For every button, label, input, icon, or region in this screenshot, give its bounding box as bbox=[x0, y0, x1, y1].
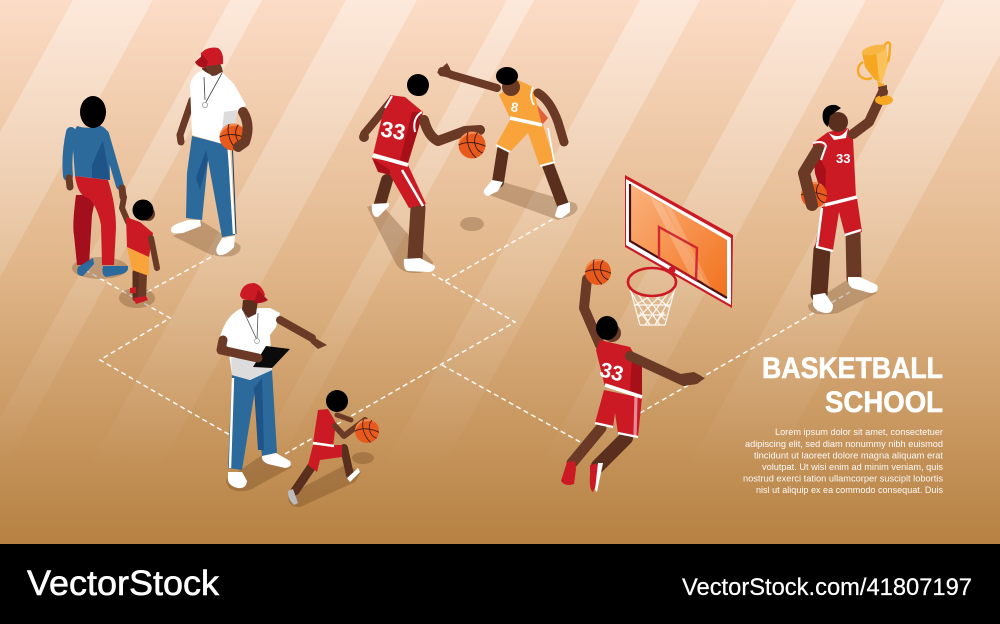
body text bbox=[743, 427, 943, 495]
footer bar bbox=[0, 544, 1000, 624]
shadows on floor bbox=[72, 182, 877, 507]
net bbox=[630, 288, 675, 325]
body text: nisl ut aliquip ex ea commodo consequat. Duis bbox=[756, 485, 943, 495]
body text: Lorem ipsum dolor sit amet, consectetuer bbox=[775, 427, 943, 437]
cap bbox=[201, 48, 223, 66]
child dribbling bbox=[288, 390, 379, 505]
woman parent bbox=[67, 96, 128, 277]
cap bbox=[240, 283, 265, 300]
child holding hand bbox=[122, 197, 157, 304]
title: BASKETBALL bbox=[762, 352, 943, 385]
jersey number: 33 bbox=[836, 151, 850, 166]
basketball hoop bbox=[625, 175, 733, 325]
title: SCHOOL bbox=[825, 386, 943, 419]
footer url: VectorStock.com/41807197 bbox=[682, 574, 972, 601]
body text: nostrud exerci tation ullamcorper suscipit lobortis bbox=[743, 474, 943, 484]
title bbox=[762, 352, 943, 419]
rim bbox=[628, 268, 676, 296]
footer logo: VectorStock bbox=[27, 564, 220, 603]
clipboard bbox=[253, 346, 290, 368]
hair bbox=[80, 96, 106, 128]
body text: volutpat. Ut wisi enim ad minim veniam, quis bbox=[762, 462, 943, 472]
trophy bbox=[858, 42, 893, 105]
court lines bbox=[85, 218, 850, 454]
coach with ball bbox=[171, 48, 248, 255]
body text: adipiscing elit, sed diam nonummy nibh euismod bbox=[745, 439, 943, 449]
body text: tincidunt ut laoreet dolore magna aliquam erat bbox=[754, 450, 943, 460]
legs bbox=[73, 195, 96, 265]
player 8 defender bbox=[437, 63, 570, 218]
backboard bbox=[625, 175, 733, 308]
jersey number: 33 bbox=[379, 116, 407, 145]
ball dribbled bbox=[458, 132, 486, 158]
jersey number: 33 bbox=[597, 358, 626, 386]
player dunking bbox=[561, 259, 705, 492]
coach with clipboard bbox=[220, 283, 327, 488]
player 33 dribbling bbox=[359, 74, 480, 272]
player with trophy bbox=[801, 42, 893, 313]
jersey number: 8 bbox=[510, 99, 519, 115]
